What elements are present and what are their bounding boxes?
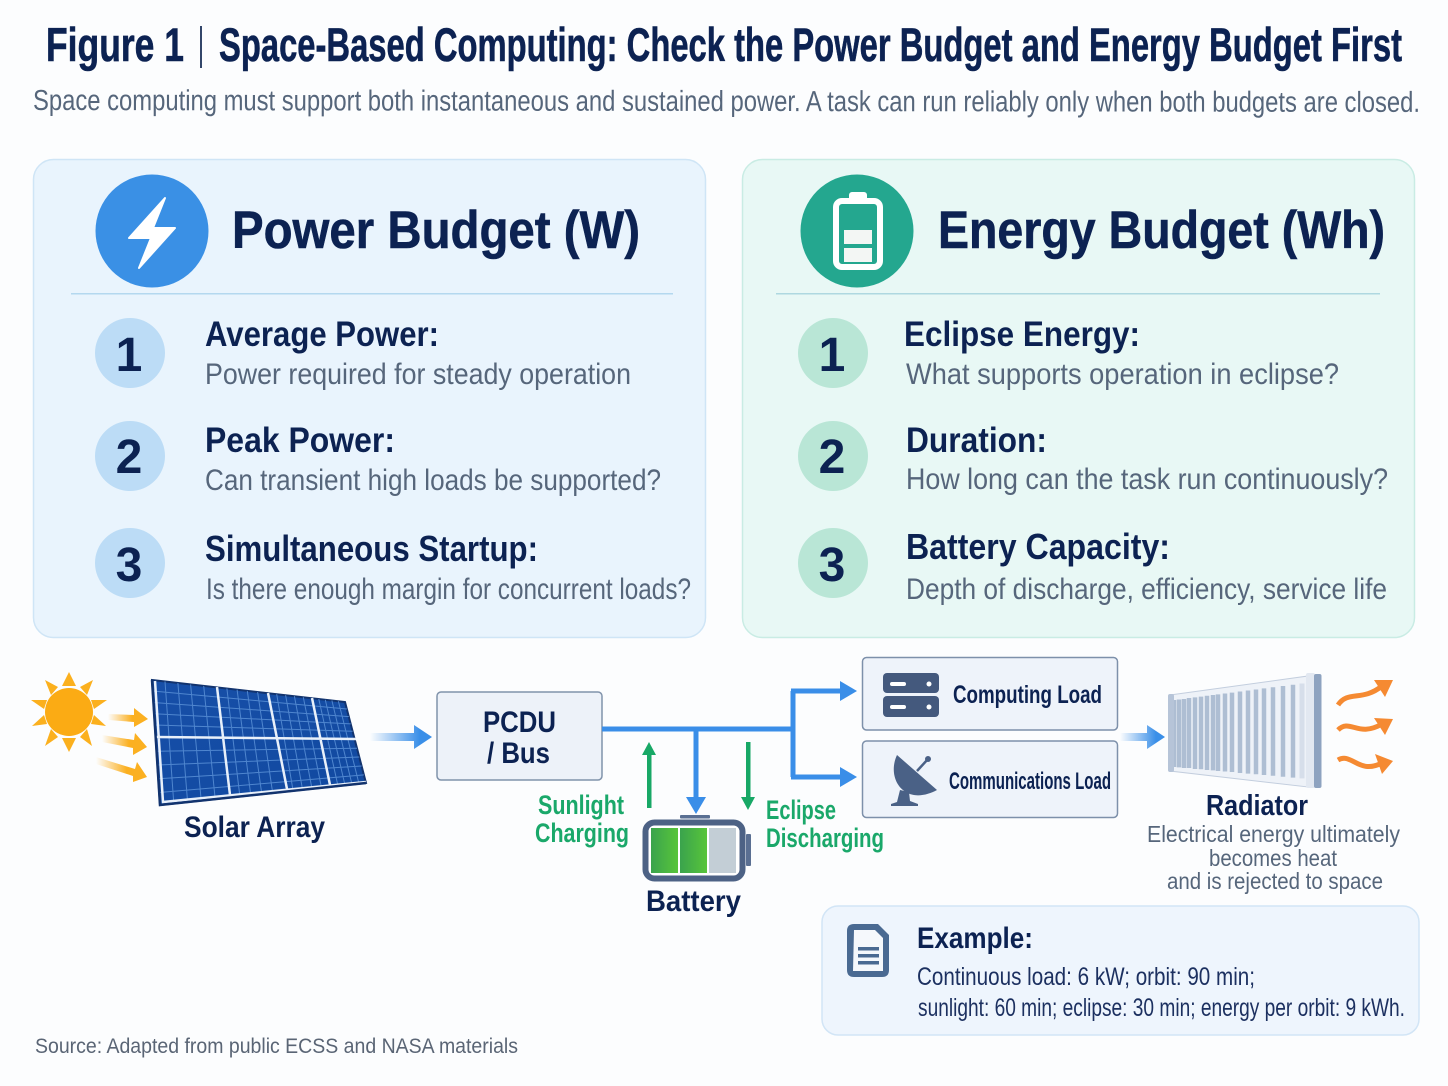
icon: radiator xyxy=(1168,673,1322,788)
panel: energy budget xyxy=(742,160,1414,638)
item: average power xyxy=(95,315,631,391)
box: communications load: Communications Load xyxy=(949,768,1111,795)
item: battery capacity: 3 xyxy=(819,539,845,592)
item: battery capacity: Battery Capacity: xyxy=(906,526,1170,567)
item: eclipse energy: 1 xyxy=(819,329,845,382)
item: eclipse energy: What supports operation in eclipse? xyxy=(906,358,1339,391)
icon: lightning bolt xyxy=(96,174,208,288)
arrow: eclipse discharging xyxy=(741,742,755,810)
item: duration: 2 xyxy=(819,431,845,484)
label: radiator: Radiator xyxy=(1206,790,1308,822)
icon: solar panel xyxy=(152,680,366,805)
item: eclipse energy xyxy=(798,315,1339,391)
label: battery: Battery xyxy=(646,885,741,918)
label: eclipse discharging xyxy=(766,795,884,853)
item: simultaneous startup xyxy=(95,528,691,606)
item: peak power: 2 xyxy=(116,431,142,484)
heading: energy budget: Energy Budget (Wh) xyxy=(938,201,1385,260)
item: average power: Average Power: xyxy=(205,315,439,354)
label: sunlight charging: Sunlight xyxy=(538,790,624,820)
panel: example xyxy=(822,906,1419,1035)
label: sunlight charging xyxy=(535,790,629,848)
item: simultaneous startup: 3 xyxy=(116,539,142,592)
title: Figure 1 xyxy=(46,18,184,71)
box: communications load xyxy=(862,741,1118,818)
icon: document xyxy=(847,924,889,977)
box: pcdu bus xyxy=(437,692,602,780)
icon: satellite dish xyxy=(891,755,937,806)
item: average power: Power required for steady operation xyxy=(205,358,631,391)
box: computing load xyxy=(862,658,1118,730)
label: sunlight charging: Charging xyxy=(535,818,629,848)
item: duration: How long can the task run continuously? xyxy=(906,463,1388,496)
arrow: sunlight charging xyxy=(642,742,656,808)
item: eclipse energy: Eclipse Energy: xyxy=(904,315,1140,354)
panel: example: Example: xyxy=(917,922,1033,955)
source note: Source: Adapted from public ECSS and NASA materials xyxy=(35,1035,518,1058)
icon: battery storage xyxy=(646,815,751,878)
item: peak power: Peak Power: xyxy=(205,421,395,460)
text: radiator description: and is rejected to space xyxy=(1167,868,1383,894)
icon: battery xyxy=(800,174,914,288)
box: pcdu bus: / Bus xyxy=(487,737,550,770)
item: average power: 1 xyxy=(116,329,142,382)
item: battery capacity: Depth of discharge, efficiency, service life xyxy=(906,573,1387,606)
item: peak power: Can transient high loads be supported? xyxy=(205,464,661,497)
panel: example: Continuous load: 6 kW; orbit: 90 min; xyxy=(917,963,1255,991)
item: battery capacity xyxy=(798,526,1387,606)
item: duration xyxy=(798,421,1388,496)
item: simultaneous startup: Is there enough margin for concurrent loads? xyxy=(206,573,691,606)
arrow: solar to pcdu xyxy=(370,725,432,749)
arrows: power bus xyxy=(602,681,857,814)
arrows: heat rejection xyxy=(1338,680,1393,774)
icon: sun xyxy=(31,672,107,752)
item: duration: Duration: xyxy=(906,421,1047,460)
item: peak power xyxy=(95,421,661,497)
text: radiator description xyxy=(1147,821,1400,894)
text: radiator description: becomes heat xyxy=(1209,845,1338,871)
box: pcdu bus: PCDU xyxy=(483,706,556,739)
label: eclipse discharging: Discharging xyxy=(766,823,884,853)
box: computing load: Computing Load xyxy=(953,681,1102,709)
label: solar array: Solar Array xyxy=(184,811,325,844)
label: eclipse discharging: Eclipse xyxy=(766,795,836,825)
arrows: sunlight rays xyxy=(96,708,148,782)
text: radiator description: Electrical energy ultimately xyxy=(1147,821,1400,847)
item: simultaneous startup: Simultaneous Startup: xyxy=(205,528,538,569)
arrow: loads to radiator xyxy=(1120,725,1165,749)
icon: server xyxy=(883,673,939,717)
panel: power budget xyxy=(34,160,706,638)
heading: power budget: Power Budget (W) xyxy=(232,201,640,260)
